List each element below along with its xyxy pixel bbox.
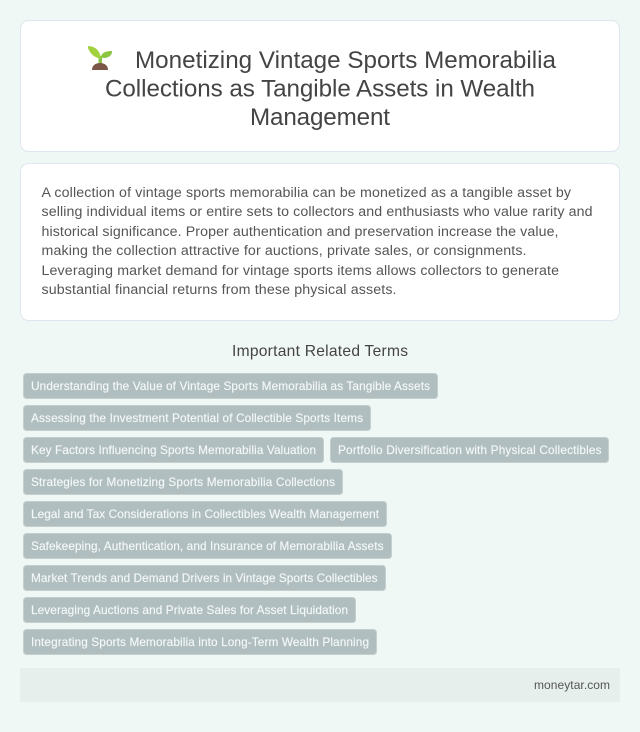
chip: market trends: Market Trends and Demand Drivers in Vintage Sports Collectibles bbox=[31, 571, 378, 585]
chip: legal and tax bbox=[24, 502, 386, 526]
text block: description bbox=[42, 185, 592, 298]
chip: investment potential bbox=[24, 406, 370, 430]
chip: portfolio diversification bbox=[330, 438, 608, 462]
title: Monetizing Vintage Sports Memorabilia bbox=[135, 47, 557, 74]
chip: long-term planning: Integrating Sports Memorabilia into Long-Term Wealth Planning bbox=[31, 635, 369, 649]
text block: description: selling individual items or entire sets to collectors and enthusiasts who value rarity and bbox=[42, 204, 592, 220]
icon: seedling bbox=[88, 46, 112, 70]
chip: portfolio diversification: Portfolio Diversification with Physical Collectibles bbox=[338, 443, 602, 457]
title bbox=[105, 47, 557, 131]
chip: understanding value: Understanding the Value of Vintage Sports Memorabilia as Tangible Assets bbox=[31, 379, 430, 393]
panel: title card bbox=[20, 20, 620, 152]
chip: key factors: Key Factors Influencing Sports Memorabilia Valuation bbox=[31, 443, 316, 457]
title: Management bbox=[250, 104, 390, 131]
chip: safekeeping: Safekeeping, Authentication, and Insurance of Memorabilia Assets bbox=[31, 539, 384, 553]
chip: auctions bbox=[24, 598, 356, 622]
chip: monetizing strategies bbox=[24, 470, 342, 494]
chip: safekeeping bbox=[24, 534, 392, 558]
chip: key factors bbox=[24, 438, 324, 462]
text block: description: Leveraging market demand for vintage sports items allows collectors to generate bbox=[42, 263, 559, 279]
chip: long-term planning bbox=[24, 630, 376, 654]
chip: market trends bbox=[24, 566, 386, 590]
panel: description bbox=[20, 164, 620, 320]
chip: monetizing strategies: Strategies for Monetizing Sports Memorabilia Collections bbox=[31, 475, 335, 489]
text block: description: substantial financial returns from these physical assets. bbox=[42, 282, 396, 298]
footer: moneytar.com bbox=[534, 678, 610, 692]
title: Collections as Tangible Assets in Wealth bbox=[105, 76, 535, 102]
text block: description: making the collection attractive for auctions, private sales, or consignments. bbox=[42, 243, 526, 259]
chip: auctions: Leveraging Auctions and Private Sales for Asset Liquidation bbox=[31, 603, 348, 617]
chip: legal and tax: Legal and Tax Considerations in Collectibles Wealth Management bbox=[31, 507, 380, 521]
chip: understanding value bbox=[24, 374, 438, 398]
text block: description: historical significance. Proper authentication and preservation increase the value, bbox=[42, 224, 558, 240]
footer bbox=[20, 668, 620, 702]
text block: description: A collection of vintage sports memorabilia can be monetized as a tangible asset by bbox=[42, 185, 572, 201]
chip: investment potential: Assessing the Investment Potential of Collectible Sports Items bbox=[31, 411, 363, 425]
heading: related terms: Important Related Terms bbox=[232, 343, 408, 360]
